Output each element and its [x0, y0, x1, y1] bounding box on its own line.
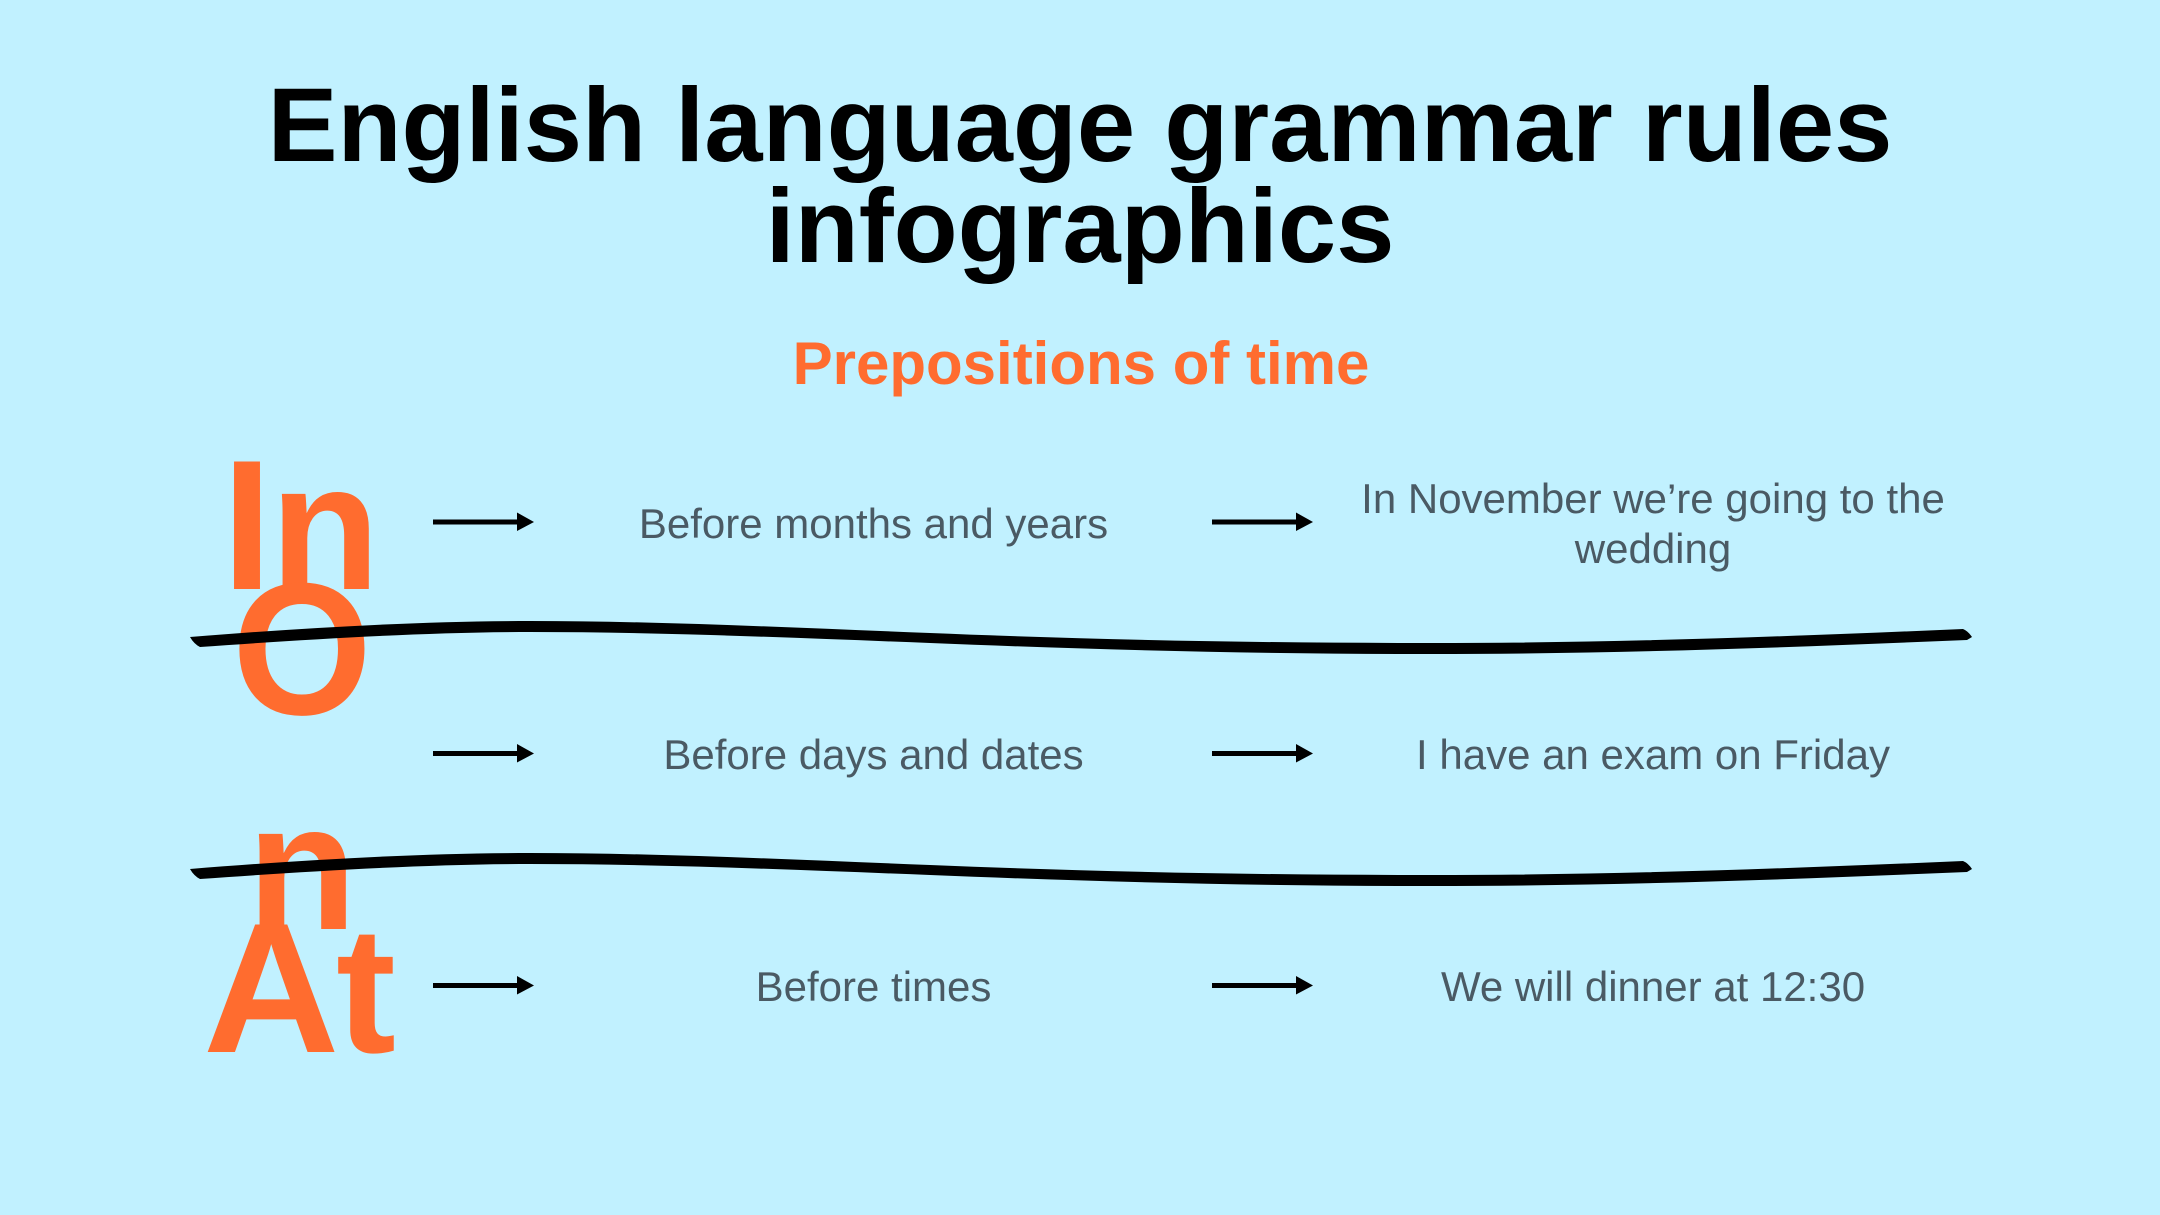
example: At: We will dinner at 12:30 — [1441, 963, 1865, 1010]
title: English language grammar rules — [268, 67, 1892, 184]
arrow: At to rule — [433, 976, 534, 994]
example: In: In November we’re going to the — [1361, 475, 1945, 522]
title: infographics — [766, 168, 1394, 285]
preposition: At: A — [203, 885, 339, 1092]
example: In: wedding — [1574, 525, 1731, 572]
title — [268, 67, 1892, 285]
arrow: In rule to example — [1212, 512, 1313, 531]
preposition: On: n — [247, 767, 357, 968]
divider: brush stroke 2 — [190, 853, 1972, 886]
preposition: At: t — [336, 890, 396, 1091]
rule: In: Before months and years — [639, 500, 1108, 547]
example: On: I have an exam on Friday — [1416, 731, 1890, 778]
arrow: At rule to example — [1212, 976, 1313, 994]
rule: On: Before days and dates — [663, 731, 1084, 778]
arrow: On rule to example — [1212, 744, 1313, 762]
preposition: On: O — [232, 544, 372, 755]
preposition: On — [232, 544, 372, 968]
divider: brush stroke 1 — [190, 621, 1972, 654]
preposition: In: I — [222, 422, 272, 629]
arrow: On to rule — [433, 744, 534, 762]
subtitle: Prepositions of time — [793, 330, 1369, 397]
arrow: In to rule — [433, 512, 534, 531]
preposition: In: n — [270, 427, 380, 628]
preposition: In — [222, 422, 380, 629]
rule: At: Before times — [756, 963, 991, 1010]
example: In — [1361, 475, 1945, 572]
